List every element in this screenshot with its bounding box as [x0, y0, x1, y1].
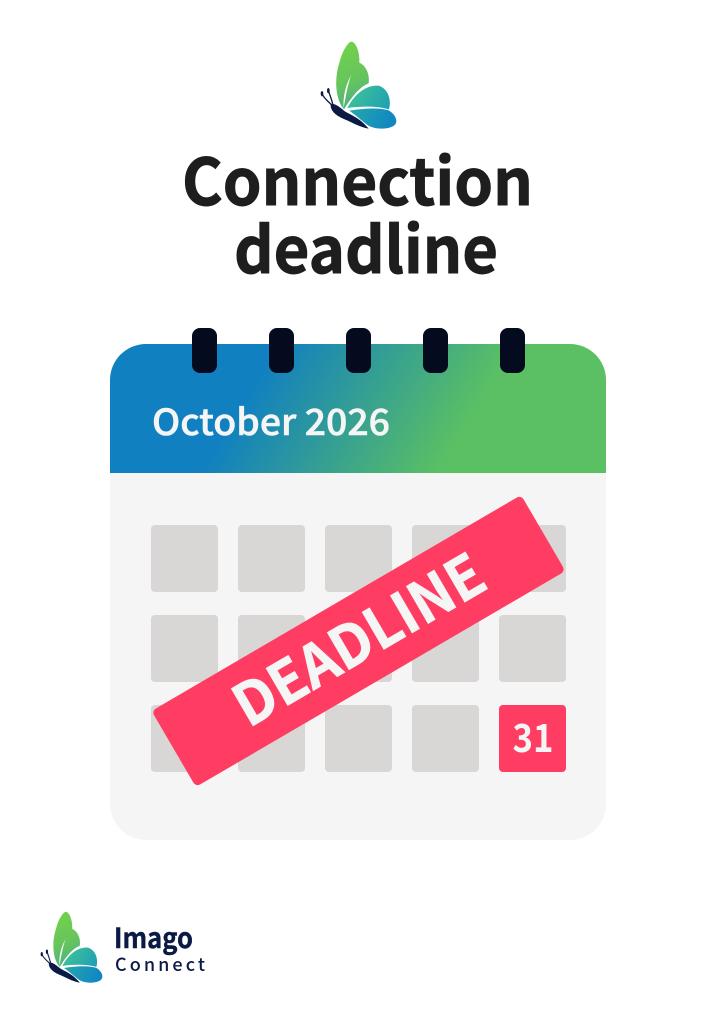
brand subname: Connect	[115, 951, 205, 977]
title: deadline	[234, 200, 498, 292]
calendar header band	[110, 344, 606, 473]
icon: butterfly logo bottom	[41, 912, 102, 983]
month label: October 2026	[152, 394, 390, 446]
calendar body	[110, 344, 606, 840]
highlighted day 31	[499, 705, 566, 772]
day cells	[151, 525, 566, 772]
binding rings	[192, 328, 525, 373]
deadline banner: DEADLINE	[215, 529, 499, 743]
highlighted day 31: 31	[512, 708, 554, 764]
logo: Imago Connect footer	[41, 912, 205, 983]
title	[182, 132, 533, 292]
title: Connection	[182, 132, 533, 224]
panel: calendar	[110, 328, 606, 840]
brand name: Imago	[114, 917, 193, 957]
deadline banner	[150, 492, 565, 787]
icon: butterfly logo top	[321, 42, 396, 129]
